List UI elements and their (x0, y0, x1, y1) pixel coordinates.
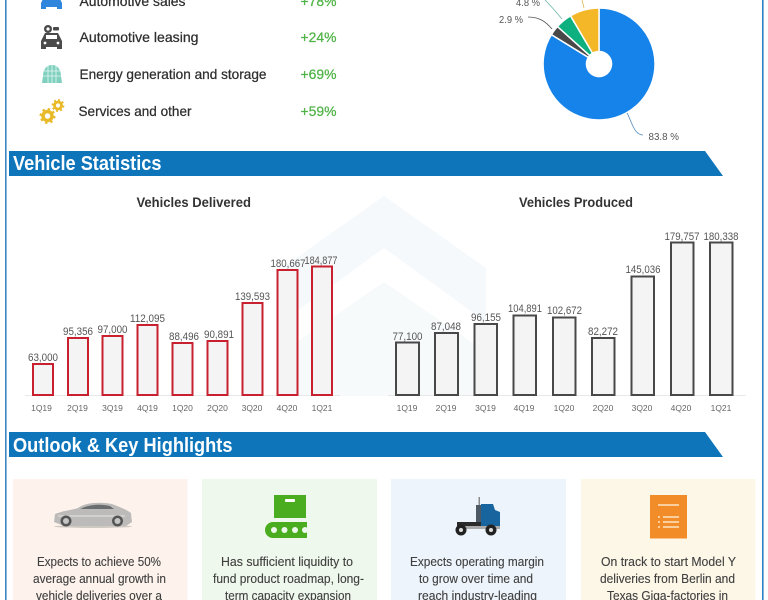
chart: vehicles produced: Vehicles Produced (519, 195, 633, 210)
chart: vehicles delivered: 97,000 (98, 324, 128, 336)
card text: fund product roadmap, long- (213, 571, 364, 586)
card text: Expects to achieve 50% (37, 554, 161, 569)
row: automotive leasing (80, 29, 336, 45)
panel: revenue growth by segment (40, 0, 336, 123)
chart: vehicles delivered: 88,496 (169, 331, 199, 343)
chart: vehicles delivered: 3Q19 (102, 403, 123, 413)
card text: deliveries from Berlin and (600, 571, 735, 586)
chart: vehicles produced: 1Q19 (397, 403, 418, 413)
chart: vehicles delivered: 4Q19 (137, 403, 158, 413)
row: services and other: Services and other (78, 103, 192, 119)
chart: vehicles delivered: 95,356 (63, 326, 93, 338)
heading ribbon: Vehicle Statistics: Vehicle Statistics (13, 153, 162, 175)
chart: vehicles produced: 82,272 (588, 326, 618, 338)
donut chart: revenue mix: 83.8 % (648, 131, 679, 143)
icon: car with key (41, 25, 62, 49)
chart: vehicles produced: 104,891 (508, 303, 542, 315)
chart: vehicles produced: 1Q20 (554, 403, 575, 413)
chart: vehicles produced: 3Q19 (475, 403, 496, 413)
chart: vehicles produced: 145,036 (626, 264, 660, 276)
chart: vehicles delivered: 2Q20 (207, 403, 228, 413)
chart: vehicles produced: 2Q20 (593, 403, 614, 413)
chart: vehicles delivered: 1Q20 (172, 403, 193, 413)
card: Model Y deliveries (581, 479, 756, 600)
chart: vehicles delivered: 90,891 (204, 329, 234, 341)
chart: vehicles produced: 4Q20 (671, 403, 692, 413)
chart: vehicles delivered: Vehicles Delivered (136, 195, 251, 210)
chart: vehicles delivered: 2Q19 (67, 403, 88, 413)
card: vehicle delivery growth (13, 479, 188, 600)
donut chart: revenue mix (499, 0, 679, 143)
chart: vehicles produced: 3Q20 (632, 403, 653, 413)
chart: vehicles delivered: 1Q21 (312, 403, 333, 413)
row: automotive leasing: Automotive leasing (80, 29, 198, 45)
chart: vehicles delivered (25, 195, 340, 413)
icon: blue car (41, 0, 62, 9)
heading ribbon: Outlook and Key Highlights (9, 432, 723, 457)
card text: average annual growth in (33, 571, 166, 586)
row: services and other: +59% (300, 103, 336, 119)
card text (600, 554, 736, 600)
row: energy generation and storage: +69% (300, 66, 336, 82)
chart: vehicles delivered: 4Q20 (277, 403, 298, 413)
chart: vehicles produced: 102,672 (547, 305, 582, 317)
donut chart: revenue mix: 2.9 % (499, 14, 523, 26)
icon: blue truck (456, 497, 500, 536)
heading ribbon: Outlook and Key Highlights: Outlook & Key Highlights (13, 435, 232, 457)
icon: solar panel (42, 65, 62, 83)
chart: vehicles produced: 2Q19 (436, 403, 457, 413)
card text: Has sufficient liquidity to (221, 554, 353, 569)
chart: vehicles produced: 87,048 (431, 321, 461, 333)
chart: vehicles delivered: 184,877 (304, 255, 338, 267)
chart: vehicles produced (388, 195, 746, 413)
card: liquidity (202, 479, 377, 600)
card text: to grow over time and (419, 571, 533, 586)
icon: gears (40, 100, 64, 123)
chart: vehicles delivered: 112,095 (130, 313, 165, 325)
card text (410, 554, 544, 600)
chart: vehicles delivered: 180,667 (270, 258, 306, 270)
chart: vehicles produced: 179,757 (664, 231, 700, 243)
card text: Expects operating margin (410, 554, 544, 569)
chart: vehicles delivered: 63,000 (28, 352, 58, 364)
card text (33, 554, 166, 600)
chart: vehicles delivered: 3Q20 (242, 403, 263, 413)
icon: conveyor belt with box (265, 495, 308, 538)
chart: vehicles delivered: 139,593 (235, 291, 270, 303)
row: services and other (78, 103, 336, 119)
icon: silver sedan (54, 503, 132, 528)
row: automotive leasing: +24% (300, 29, 336, 45)
card text: On track to start Model Y (601, 554, 736, 569)
card text (213, 554, 364, 600)
icon: orange document (650, 495, 687, 538)
row: energy generation and storage: Energy generation and storage (80, 66, 267, 82)
heading ribbon: Vehicle Statistics (9, 151, 723, 176)
row: automotive sales (80, 0, 336, 9)
chart: vehicles produced: 4Q19 (514, 403, 535, 413)
chart: vehicles produced: 180,338 (704, 231, 738, 243)
chart: vehicles produced: 77,100 (392, 331, 422, 343)
chart: vehicles produced: 96,155 (471, 312, 501, 324)
chart: vehicles produced: 1Q21 (711, 403, 732, 413)
card: operating margin (391, 479, 566, 600)
chart: vehicles delivered: 1Q19 (31, 403, 52, 413)
